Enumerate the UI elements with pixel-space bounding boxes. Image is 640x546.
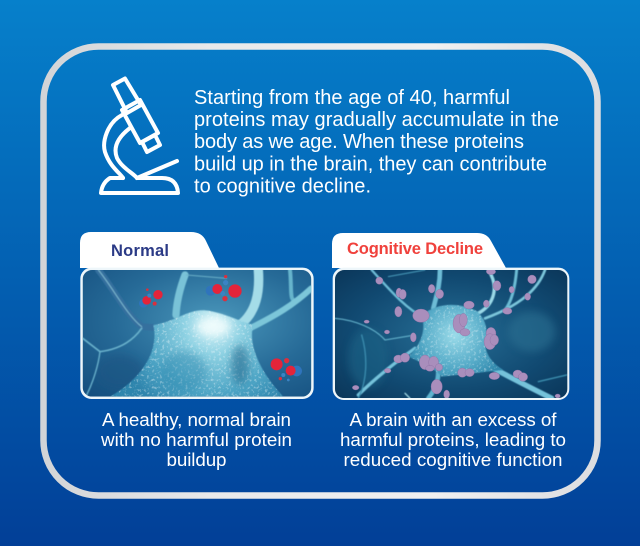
intro paragraph: body as we age. When these proteins (194, 131, 524, 153)
caption: cognitive decline (340, 409, 566, 470)
protein clumps (352, 269, 560, 399)
image: healthy neuron (81, 268, 313, 398)
rounded panel frame (44, 46, 598, 496)
protein cluster 2 (206, 275, 242, 301)
protein cluster 3 (271, 358, 302, 381)
panel: normal (80, 232, 313, 470)
intro paragraph: proteins may gradually accumulate in the (194, 109, 559, 131)
intro paragraph: to cognitive decline. (194, 176, 371, 198)
intro paragraph: build up in the brain, they can contribute (194, 154, 547, 176)
caption: normal: A healthy, normal brain (102, 409, 291, 430)
caption: normal: buildup (166, 449, 226, 470)
intro paragraph (194, 87, 559, 198)
dendrites (335, 270, 567, 398)
protein cluster 1 (139, 288, 163, 308)
icon: microscope (101, 78, 178, 193)
cell body (110, 310, 283, 397)
caption: cognitive decline: reduced cognitive function (344, 449, 562, 470)
tab: normal: Normal (111, 242, 169, 260)
caption: normal (100, 409, 292, 470)
dendrites (83, 270, 311, 395)
tab: cognitive decline: Cognitive Decline (347, 240, 483, 258)
caption: normal: with no harmful protein (100, 429, 292, 450)
caption: cognitive decline: harmful proteins, leading to (340, 429, 566, 450)
tab: normal (80, 232, 219, 268)
tab: cognitive decline (332, 233, 506, 268)
caption: cognitive decline: A brain with an excess of (350, 409, 557, 430)
cell body (408, 305, 503, 377)
panel: cognitive decline (332, 233, 569, 470)
intro paragraph: Starting from the age of 40, harmful (194, 87, 510, 109)
image: neuron with protein buildup (333, 268, 569, 399)
